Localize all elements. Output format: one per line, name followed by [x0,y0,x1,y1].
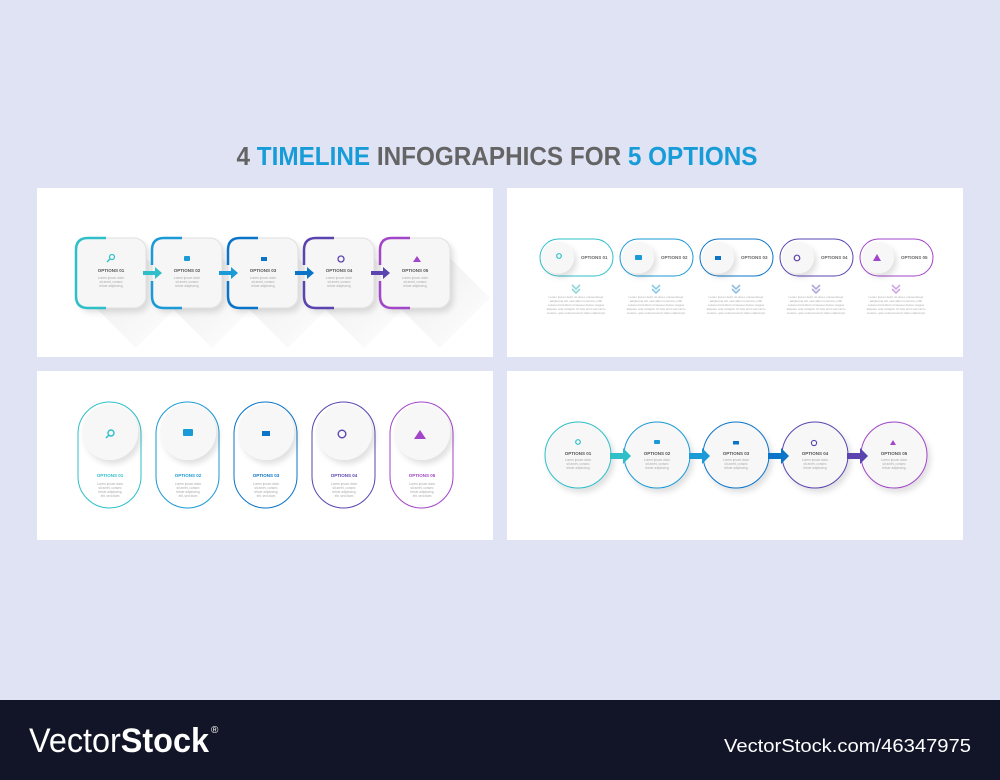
panel: circle timeline [507,371,963,540]
step A4: OPTIONS 04 [326,268,353,273]
pill B5 [860,239,933,315]
step A1: sit amet, consec [99,280,123,284]
pill B3: Lorem ipsum dolor sit amet, consectetuer [708,295,764,299]
capsule C1: Lorem ipsum dolor [97,482,124,486]
capsule C2: Lorem ipsum dolor [175,482,202,486]
pill B1: Lorem ipsum dolor sit amet, consectetuer [548,295,604,299]
capsule C1 [78,402,141,508]
circle D5 [861,422,927,488]
step A1: Lorem ipsum dolor [98,276,125,280]
pill B2: adipiscing elit, sed diam nonummy nibh [630,299,683,303]
capsule C4: elit, sed diam [335,494,354,498]
footer logo: VectorStock [29,722,209,760]
capsule C2: OPTIONS 02 [175,473,202,478]
circle D1: Lorem ipsum dolor [565,458,592,462]
circle D4: OPTIONS 04 [802,451,829,456]
pill B2 [620,239,693,315]
pill B3: OPTIONS 03 [741,255,768,260]
step A3 [228,238,298,308]
panel: pill timeline [507,188,963,357]
circle D2: tetuer adipiscing [645,466,669,470]
capsule C3: elit, sed diam [257,494,276,498]
pill B3: adipiscing elit, sed diam nonummy nibh [710,299,763,303]
pill B1: adipiscing elit, sed diam nonummy nibh [550,299,603,303]
pill B1: aliquam erat volutpat. Ut wisi enim ad minim [547,307,606,311]
step A2: OPTIONS 02 [174,268,201,273]
circle D5: OPTIONS 05 [881,451,908,456]
circle D3: tetuer adipiscing [724,466,748,470]
circle D5: tetuer adipiscing [882,466,906,470]
pill B5: veniam, quis nostrud exerci tation ullamcorp [867,311,926,315]
capsule C3: tetuer adipiscing [254,490,278,494]
step A4: tetuer adipiscing [327,284,351,288]
capsule C2: elit, sed diam [179,494,198,498]
step A2: tetuer adipiscing [175,284,199,288]
pill B1: euismod tincidunt ut laoreet dolore magna [548,303,604,307]
registered mark: ® [211,725,219,736]
capsule C2: tetuer adipiscing [176,490,200,494]
circle D1 [545,422,611,488]
pill B4: adipiscing elit, sed diam nonummy nibh [790,299,843,303]
circle D3: OPTIONS 03 [723,451,750,456]
pill B2: Lorem ipsum dolor sit amet, consectetuer [628,295,684,299]
footer url: VectorStock.com/46347975 [724,736,971,756]
pill B3 [700,239,773,315]
capsule C2 [156,402,219,508]
pill B5: OPTIONS 05 [901,255,928,260]
circle D4: tetuer adipiscing [803,466,827,470]
capsule C5: Lorem ipsum dolor [409,482,436,486]
circle D3 [703,422,769,488]
step A1: tetuer adipiscing [99,284,123,288]
footer band [0,700,1000,780]
step A5: sit amet, consec [403,280,427,284]
pill B2: OPTIONS 02 [661,255,688,260]
circle D3: Lorem ipsum dolor [723,458,750,462]
capsule C2: sit amet, consec [176,486,200,490]
pill B1: veniam, quis nostrud exerci tation ullamcorp [547,311,606,315]
capsule C4: tetuer adipiscing [332,490,356,494]
circle D2: sit amet, consec [645,462,669,466]
pill B3: veniam, quis nostrud exerci tation ullamcorp [707,311,766,315]
circle D5: sit amet, consec [882,462,906,466]
pill B4: Lorem ipsum dolor sit amet, consectetuer [788,295,844,299]
circle D2: OPTIONS 02 [644,451,671,456]
step A1: OPTIONS 01 [98,268,125,273]
circle D2: Lorem ipsum dolor [644,458,671,462]
circle D5: Lorem ipsum dolor [881,458,908,462]
circle D4 [782,422,848,488]
pill B4: OPTIONS 04 [821,255,848,260]
circle D3: sit amet, consec [724,462,748,466]
step A3: Lorem ipsum dolor [250,276,277,280]
step A2: Lorem ipsum dolor [174,276,201,280]
panel: capsule timeline [37,371,493,540]
pill B5: adipiscing elit, sed diam nonummy nibh [870,299,923,303]
long shadows A [96,258,490,348]
title: 4 TIMELINE INFOGRAPHICS FOR 5 OPTIONS [236,141,758,171]
capsule C1: sit amet, consec [98,486,122,490]
pill B1: OPTIONS 01 [581,255,608,260]
capsule C4: OPTIONS 04 [331,473,358,478]
pill B4: veniam, quis nostrud exerci tation ullamcorp [787,311,846,315]
pill B5: aliquam erat volutpat. Ut wisi enim ad minim [867,307,926,311]
pill B3: aliquam erat volutpat. Ut wisi enim ad minim [707,307,766,311]
pill B2: aliquam erat volutpat. Ut wisi enim ad minim [627,307,686,311]
capsule C3 [234,402,297,508]
step A3: tetuer adipiscing [251,284,275,288]
step A4: sit amet, consec [327,280,351,284]
step A5: Lorem ipsum dolor [402,276,429,280]
capsule C1: OPTIONS 01 [97,473,124,478]
capsule C1: tetuer adipiscing [98,490,122,494]
step A5: OPTIONS 05 [402,268,429,273]
capsule C5: sit amet, consec [410,486,434,490]
circle D1: sit amet, consec [566,462,590,466]
step A2 [152,238,222,308]
step A4: Lorem ipsum dolor [326,276,353,280]
capsule C5 [390,402,453,508]
capsule C5: OPTIONS 05 [409,473,436,478]
capsule C4: sit amet, consec [332,486,356,490]
pill B1 [540,239,613,315]
capsule C4: Lorem ipsum dolor [331,482,358,486]
arrows A [143,267,390,279]
arrows D [610,448,868,464]
circle D2 [624,422,690,488]
capsule C5: tetuer adipiscing [410,490,434,494]
pill B4: euismod tincidunt ut laoreet dolore magna [788,303,844,307]
step A5 [380,238,450,308]
pill B2: euismod tincidunt ut laoreet dolore magna [628,303,684,307]
step A4 [304,238,374,308]
step A3: OPTIONS 03 [250,268,277,273]
pill B3: euismod tincidunt ut laoreet dolore magna [708,303,764,307]
panel: square timeline [37,188,493,357]
capsule C5: elit, sed diam [413,494,432,498]
step A1 [76,238,146,308]
pill B5: euismod tincidunt ut laoreet dolore magna [868,303,924,307]
capsule C4 [312,402,375,508]
step A5: tetuer adipiscing [403,284,427,288]
circle D1: tetuer adipiscing [566,466,590,470]
pill B2: veniam, quis nostrud exerci tation ullamcorp [627,311,686,315]
pill B4 [780,239,853,315]
capsule C3: Lorem ipsum dolor [253,482,280,486]
capsule C3: sit amet, consec [254,486,278,490]
capsule C3: OPTIONS 03 [253,473,280,478]
step A3: sit amet, consec [251,280,275,284]
step A2: sit amet, consec [175,280,199,284]
pill B5: Lorem ipsum dolor sit amet, consectetuer [868,295,924,299]
capsule C1: elit, sed diam [101,494,120,498]
pill B4: aliquam erat volutpat. Ut wisi enim ad minim [787,307,846,311]
circle D4: sit amet, consec [803,462,827,466]
circle D4: Lorem ipsum dolor [802,458,829,462]
circle D1: OPTIONS 01 [565,451,592,456]
